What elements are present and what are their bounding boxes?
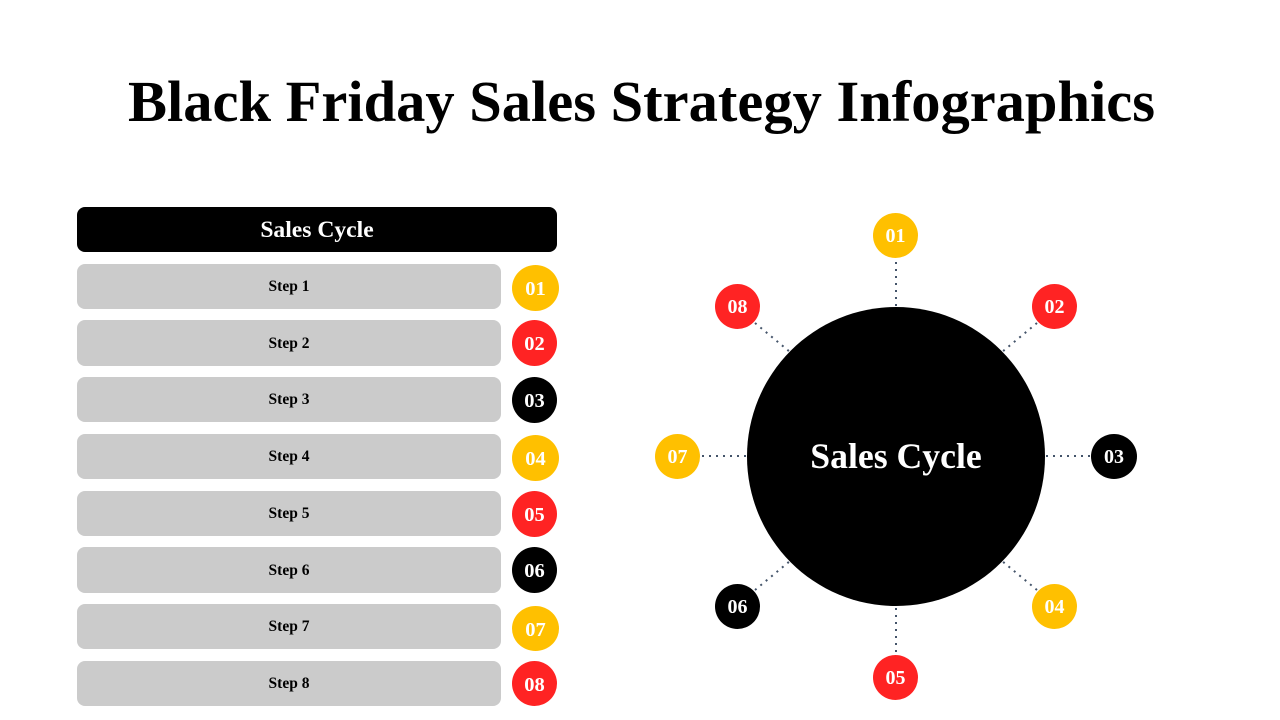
step 7 bar: Step 7	[269, 618, 309, 635]
dotted connectors	[702, 262, 1090, 652]
step 6 badge	[512, 547, 557, 593]
step 5 badge: 05	[524, 504, 545, 526]
step 1 badge	[512, 265, 559, 311]
step 1 badge: 01	[525, 278, 546, 300]
step 3 badge: 03	[524, 390, 545, 412]
step 6 badge: 06	[524, 560, 545, 582]
node 04	[1032, 584, 1077, 629]
step 5 badge	[512, 491, 557, 537]
node 04: 04	[1044, 596, 1064, 618]
node 03: 03	[1104, 446, 1124, 468]
step 6 bar: Step 6	[269, 562, 309, 579]
node 05: 05	[886, 667, 906, 689]
node 02: 02	[1044, 296, 1064, 318]
node 05	[873, 655, 918, 700]
step 4 badge	[512, 435, 559, 481]
step 2 badge: 02	[524, 333, 545, 355]
list heading: Sales Cycle	[260, 217, 374, 243]
step 4 bar	[77, 434, 501, 479]
node 03	[1091, 434, 1137, 479]
step 7 badge	[512, 606, 559, 651]
step 3 bar: Step 3	[269, 391, 309, 408]
central circle	[747, 307, 1045, 606]
step 8 badge: 08	[524, 674, 545, 696]
step 8 badge	[512, 661, 557, 706]
node 08	[715, 284, 760, 329]
step 2 bar	[77, 320, 501, 366]
node 01	[873, 213, 918, 258]
node 06: 06	[728, 596, 748, 618]
step 5 bar: Step 5	[269, 505, 309, 522]
step 2 bar: Step 2	[269, 335, 309, 352]
node 07	[655, 434, 700, 479]
central circle: Sales Cycle	[810, 436, 982, 476]
chart: radial sales cycle	[655, 213, 1137, 700]
step 8 bar: Step 8	[269, 675, 309, 692]
step 7 badge: 07	[525, 619, 546, 641]
panel: step list	[77, 207, 559, 706]
step 7 bar	[77, 604, 501, 649]
step 6 bar	[77, 547, 501, 593]
step 1 bar: Step 1	[269, 278, 309, 295]
step 5 bar	[77, 491, 501, 536]
node 07: 07	[668, 446, 688, 468]
step 1 bar	[77, 264, 501, 309]
step 3 bar	[77, 377, 501, 422]
node 08: 08	[728, 296, 748, 318]
node 01: 01	[886, 225, 906, 247]
step 4 badge: 04	[525, 448, 546, 470]
node 02	[1032, 284, 1077, 329]
node 06	[715, 584, 760, 629]
step 3 badge	[512, 377, 557, 423]
step 8 bar	[77, 661, 501, 706]
step 4 bar: Step 4	[269, 448, 309, 465]
step 2 badge	[512, 320, 557, 366]
title: Black Friday Sales Strategy Infographics	[128, 69, 1155, 134]
list heading	[77, 207, 557, 252]
